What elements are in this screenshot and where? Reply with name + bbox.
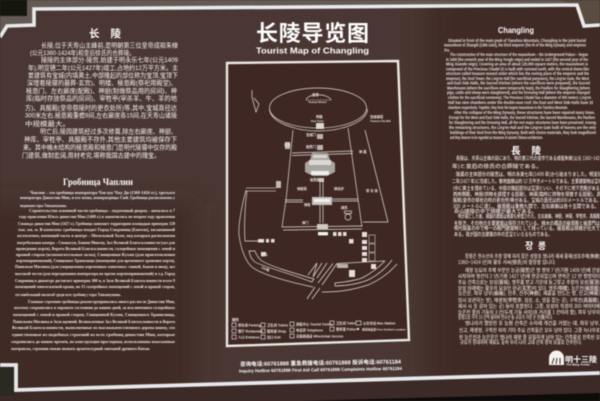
Japanese body text — [452, 155, 600, 238]
Russian body text — [11, 190, 176, 351]
precinct walls — [282, 128, 388, 230]
burial mound Baocheng: 明楼 — [316, 114, 323, 119]
Russian body text: Чанлин – это гробница императора Чэн-цзу Чжу Ди (1360-1424 гг.), третьего — [30, 190, 176, 195]
map labels: 神门 — [302, 220, 309, 225]
logo: The Ming Tombs — [549, 351, 598, 366]
map legend: 旅游商品部 Free Guided Location — [362, 328, 406, 332]
map labels: 棱恩门 — [306, 144, 317, 149]
contact hotlines — [239, 357, 403, 373]
Russian body text: тыс. кв. м. В комплекс гробницы входят Город Сокровищ (Баочэн), засыпанный — [18, 227, 175, 232]
map legend: 入口 Entrance — [238, 334, 260, 340]
map legend: 卫生间 Toilet — [336, 320, 356, 326]
map labels: 长陵 — [284, 142, 291, 147]
Chinese body text: 神库、宰牲亭、具服殿不存外,其他主要建筑均被保存下 — [24, 134, 177, 144]
Russian body text: проведения жертв), Ворота Великой Благосклонности, галерейные помещения с левой и — [16, 246, 175, 251]
Russian body text: сохранились до наших времен, их конструкция просторная, использованы изысканные — [11, 339, 175, 344]
map legend: 电话亭 Telephone — [296, 328, 323, 332]
map legend: 游客中心 Tourist Center — [296, 322, 333, 326]
heading: map title Chinese: 长陵导览图 — [256, 21, 369, 46]
Japanese body text: 年)と皇后の徐氏の合葬陵である。 — [452, 163, 542, 170]
heading: Changling English: Changling — [498, 25, 534, 35]
Russian body text: высокой чести (для переодевания императора во время жертвоприношений) и т.д. Город — [15, 271, 176, 276]
Chinese body text: 库(临时存放祭品的房间)、宰牲亭(宰杀羊、牛、羊的地 — [26, 94, 178, 102]
map labels: 碑亭 — [341, 205, 348, 210]
icon: north compass — [252, 90, 259, 112]
Chinese body text: 300米左右,棱恩殿重檐9间,左右廊庑各15间,在天寿山诸陵 — [25, 110, 178, 120]
Russian body text: помещений многоскатной крыш, по 15 галерейных помещений с левой и правой сторон, — [15, 284, 175, 289]
panel: English introduction — [444, 25, 596, 140]
white bottom border line — [0, 365, 600, 390]
Russian body text: поэтому сохранились в хорошем состоянии до наших дней, за исключением галерейных — [14, 305, 176, 310]
heading: Changling Japanese: 長 陵 — [511, 143, 541, 157]
Russian body text: единственные из подобных строений из всех гробниц династии Мин, которые — [12, 332, 175, 337]
burial mound Baocheng: Treasure City Wall — [370, 120, 391, 123]
map labels: 棱恩殿 — [310, 177, 321, 182]
Russian body text: жертвоприношений), Священное Хранилище (помещение для временного хранения жертв), — [16, 258, 175, 263]
map legend: 图例 — [232, 317, 239, 322]
Russian body text: Павильон Мясника (для умерщвления жертвенных животных: свиней, быков и овец), зал — [15, 264, 175, 269]
panel: Russian text — [11, 177, 176, 351]
Chinese body text: 门建筑,做制宏阔,用材考究,堪称我国古建中的瑰宝。 — [22, 150, 160, 160]
map legend: 无障碍通道 Wheelchair Access — [296, 334, 343, 338]
map legend: 出口 Exit — [267, 334, 281, 340]
map labels — [261, 132, 378, 273]
heading: Russian: Гробница Чаплин — [63, 177, 133, 188]
Russian body text: погребальная камера – Сюаньгун, Башня Минлоу, Зал Великой Благосклонности (зал для — [17, 240, 175, 245]
burial mound Baocheng: Soul Tower — [311, 120, 324, 123]
Chinese body text — [22, 40, 179, 160]
Chinese body text: 长陵,位于天寿山主峰前,是明朝第三位皇帝成祖朱棣 — [41, 40, 179, 50]
Chinese body text: 要建筑有宝城(内填黄土,中部隆起的部位称为宝顶,宝顶下 — [28, 70, 178, 80]
hotlines Chinese: 咨询电话:60761888 重急救援电话:60761888 投诉电话:60761184 — [240, 357, 402, 368]
Russian body text: Строительство основной части гробницы – подземный дворец – началось в 7 — [29, 208, 176, 213]
panel: Chinese introduction — [22, 27, 179, 160]
Chinese body text: (公元1360-1424年)和皇后徐氏的合葬陵。 — [30, 48, 135, 57]
Japanese body text: 寿山諸陵の中で規模が最大である。 — [454, 208, 537, 215]
Russian body text: желтоземом, имеющий часть в центре – Могильный Холм, под которым расположена — [17, 233, 176, 238]
Russian body text: правой сторон (вспомогательные залы), Священная Кухня (для приготовления — [16, 252, 176, 257]
Chinese body text: 来。其中楠木结构的棱恩殿和棱恩门是明代陵寝中仅存的殿 — [23, 142, 178, 152]
burial mound Baocheng: 宝顶 — [312, 92, 319, 97]
heading: map title English: Tourist Map of Changling — [256, 46, 369, 56]
Chinese body text: 方)、具服殿(皇帝祭陵时的更衣处所)等,其中,宝城直径达 — [25, 103, 178, 112]
Russian body text: Великой Благосклонности, выполненные из высококачественного дерева нанму, это — [12, 325, 176, 330]
map labels: 116路 — [261, 264, 271, 273]
roads — [239, 188, 397, 299]
soul tower and axis buildings — [316, 123, 324, 182]
Russian body text: императора Династии Мин, и его жены, императрицы Сюй. Гробница расположена у — [20, 195, 176, 200]
map labels: 神库 — [304, 202, 311, 207]
map labels: 神 路 — [359, 149, 367, 154]
Korean body text: 1360~1424 년)와 황후 서씨(徐氏)의 합장릉 입니다. — [458, 259, 556, 266]
map labels: 神厨库 — [297, 186, 308, 191]
Japanese body text: ある。我が国の古建築の中の至宝といえるものである。 — [454, 231, 552, 238]
Chinese body text: 年),明宣德二年(公元1427年)竣工,占地约12万平方米。主 — [28, 63, 178, 72]
Russian body text: году правления Юнлэ династии Мин (1409 г.) и закончилось во втором году правления — [19, 214, 175, 219]
map legend: 服务部 Shop — [267, 328, 286, 334]
Korean body text — [458, 253, 600, 346]
main hall complex — [305, 153, 352, 235]
map labels: 停 车 场 — [366, 188, 378, 193]
Russian body text: подножия горы Тяньшоушань. — [20, 203, 67, 208]
logo: The Ming Tombs: The Ming Tombs — [566, 362, 590, 366]
Russian body text: Главные строения гробницы реконструировались много раз после Династии Мин, — [28, 299, 175, 304]
map legend: 公交车站 Bus Station — [363, 320, 395, 326]
heading: Changling Korean: 장릉 — [525, 239, 546, 252]
panel: Korean introduction — [458, 239, 600, 346]
Chinese body text: 陵陵的主体部分-陵宫,始建于明永乐七年(公元1409 — [41, 55, 178, 64]
panel: Japanese introduction — [452, 143, 600, 238]
burial mound Baocheng: Treasure Mound — [308, 101, 327, 104]
map legend: 卫生间 Toilets — [267, 322, 288, 328]
panel: tourist map — [227, 61, 409, 346]
Russian body text: материалы, строения можно назвать архитектурной святыней древнего Китая. — [11, 346, 150, 351]
Russian body text: Сокровищ в диаметре достигает примерно 300 м, в Зале Великой Благосклонности всего 9 — [15, 278, 176, 283]
white border line — [0, 5, 600, 37]
map legend: 警务室 Police — [336, 326, 357, 332]
Russian body text: Павильона Мясника и Зала одеяний. Великолепные Зал Великой Благосклонности и Ворота — [13, 319, 176, 324]
Russian body text: это наибольший масштаб среди всех гробниц у горы Тяньшоушань. — [15, 292, 121, 297]
English body text — [444, 38, 596, 140]
logo: The Ming Tombs: 明十三陵 — [565, 354, 598, 364]
Chinese body text: 明亡后,陵园建筑经过多次修葺,除左右廊庑、神厨、 — [40, 126, 177, 136]
burial mound Baocheng: 宝城城墙 — [370, 114, 384, 119]
map labels: 神帛炉 — [334, 186, 345, 191]
Chinese body text: 棱恩门、左右廊庑(配殿)、神厨(制做祭品用的房间)、神 — [26, 86, 177, 95]
map legend: 餐厅 Restaurant — [238, 328, 264, 334]
map legend: 停车场 Parking — [238, 322, 261, 328]
map legend — [232, 317, 406, 340]
Korean body text: 종횡으로 각각 15 간씩 달하여 천수산 등 규모가 가장 큰 전(殿)이다. — [458, 314, 553, 321]
Chinese body text: 中规模最大。 — [25, 119, 70, 128]
Russian body text: помещений с левой и правой сторон, Священной Кухни, Священного Хранилища, — [13, 312, 175, 317]
map icons — [258, 142, 376, 277]
map labels: 宝城门 — [306, 132, 317, 137]
English body text: Xu. — [444, 48, 450, 52]
map frame — [227, 61, 409, 346]
burial mound Baocheng — [270, 88, 391, 131]
heading: Changling Chinese: 长 陵 — [89, 27, 122, 40]
Chinese body text: 深埋着陵寝的墓葬-玄宫)、明楼、棱恩殿(祭祀用殿堂)、 — [27, 78, 177, 87]
Russian body text: Сюаньдэ династии Мин (1427 г.). Гробница занимает территорию площадью примерно 120 — [18, 221, 176, 226]
map labels: 出口 — [261, 252, 268, 257]
hotlines English: Inquiry Hotline 60761888 First Aid Call 60761888 Complaints Hotline 60761184 — [239, 366, 403, 373]
